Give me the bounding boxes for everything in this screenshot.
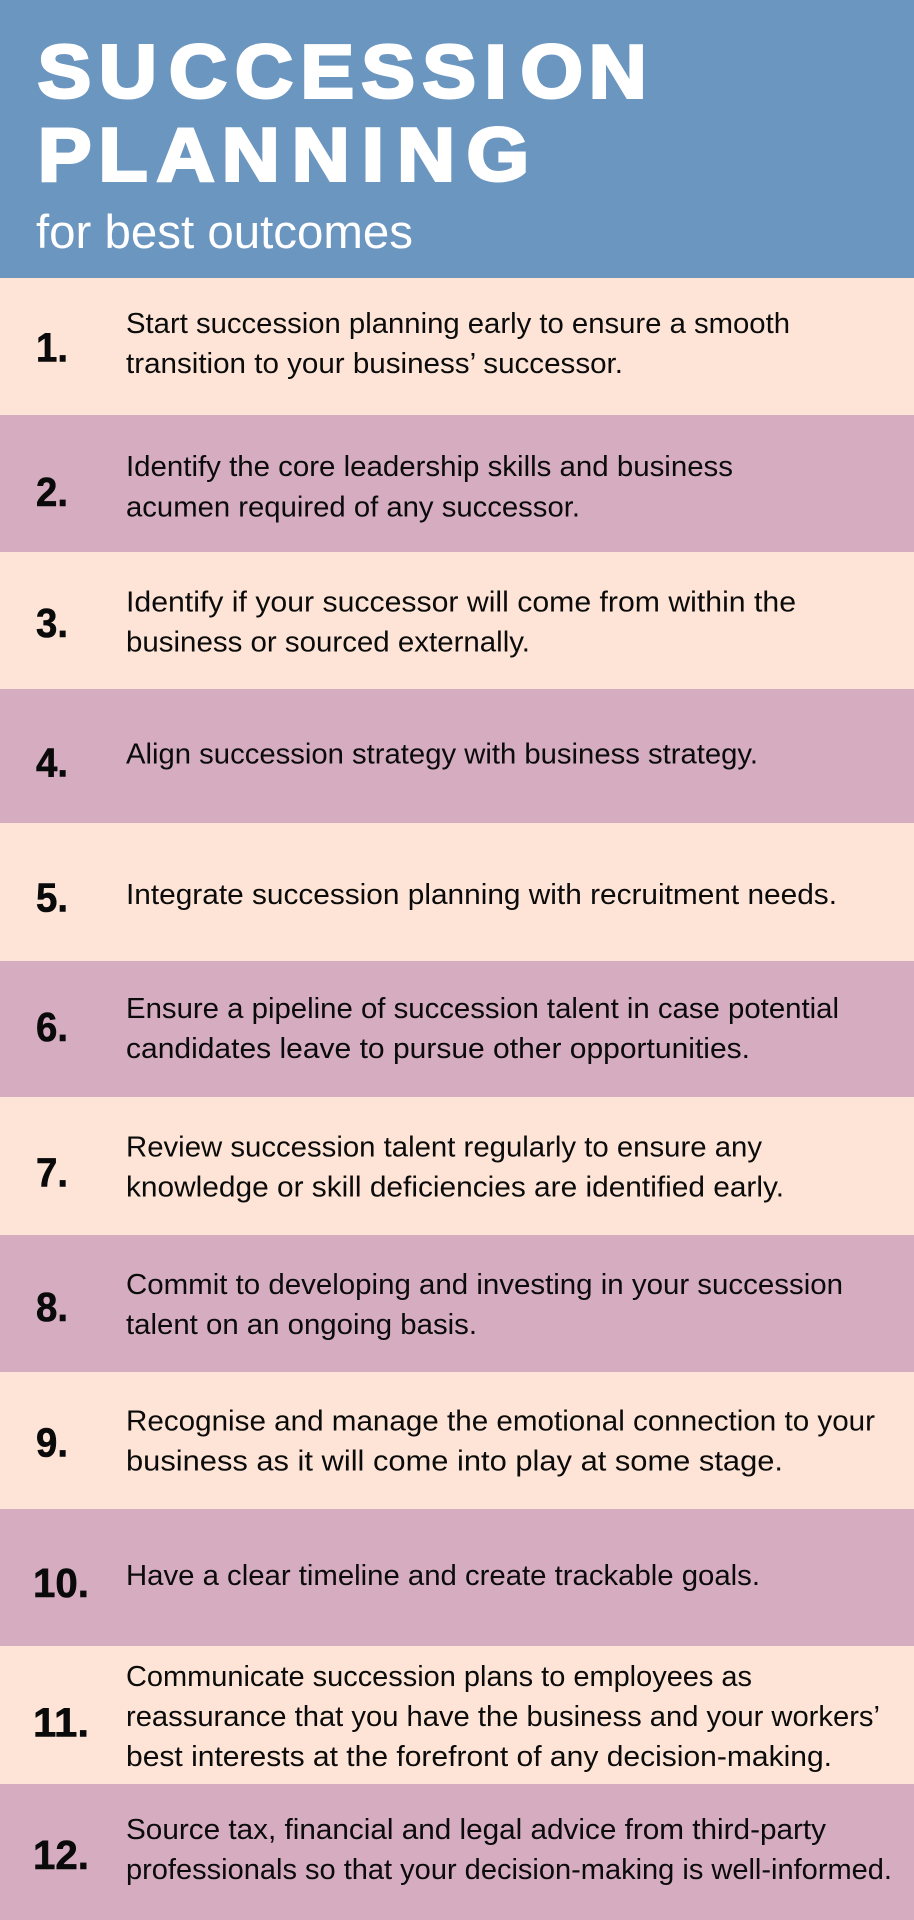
tip 4 text: Align succession strategy with business strategy.	[126, 738, 758, 770]
number 5: 5.	[36, 874, 68, 920]
number 9: 9.	[36, 1420, 68, 1466]
tip 11 text: reassurance that you have the business and your workers’	[126, 1701, 880, 1733]
number 1: 1.	[36, 324, 68, 370]
row 8	[0, 1235, 914, 1372]
tip 5 text: Integrate succession planning with recruitment needs.	[126, 879, 837, 911]
tip 3 text	[126, 586, 796, 658]
row 10	[0, 1509, 914, 1646]
tip 1 text	[126, 308, 790, 380]
title: PLANNING	[38, 114, 529, 197]
tip 1 text: Start succession planning early to ensure a smooth	[126, 308, 790, 340]
tip 8 text	[126, 1269, 843, 1341]
tip 9 text: business as it will come into play at some stage.	[126, 1446, 783, 1478]
row 9	[0, 1372, 914, 1509]
number 3: 3.	[36, 600, 68, 646]
tip 6 text	[126, 993, 839, 1065]
tip 6 text: candidates leave to pursue other opportunities.	[126, 1033, 750, 1065]
row 7	[0, 1097, 914, 1235]
row 5	[0, 823, 914, 961]
row 11	[0, 1646, 914, 1784]
tip 12 text	[126, 1814, 892, 1886]
tip 2 text	[126, 451, 733, 524]
number 4: 4.	[36, 740, 68, 786]
subtitle: for best outcomes	[36, 205, 413, 258]
tip 2 text: Identify the core leadership skills and business	[126, 451, 733, 483]
number 8: 8.	[36, 1284, 68, 1330]
tip 6 text: Ensure a pipeline of succession talent in case potential	[126, 993, 839, 1025]
tip 8 text: talent on an ongoing basis.	[126, 1309, 477, 1341]
tip 9 text	[126, 1406, 875, 1478]
tip 10 text: Have a clear timeline and create trackable goals.	[126, 1560, 760, 1592]
tip 7 text	[126, 1132, 784, 1204]
tip 3 text: business or sourced externally.	[126, 626, 530, 658]
tip 12 text: professionals so that your decision-making is well-informed.	[126, 1854, 892, 1886]
tip 11 text: best interests at the forefront of any decision-making.	[126, 1741, 832, 1773]
tip 8 text: Commit to developing and investing in your succession	[126, 1269, 843, 1301]
tip 7 text: knowledge or skill deficiencies are identified early.	[126, 1172, 784, 1204]
row 6	[0, 961, 914, 1097]
row 12	[0, 1784, 914, 1920]
row 3	[0, 552, 914, 689]
tip 9 text: Recognise and manage the emotional connection to your	[126, 1406, 875, 1438]
row 1	[0, 278, 914, 415]
tip 3 text: Identify if your successor will come from within the	[126, 586, 796, 618]
number 2: 2.	[36, 469, 68, 515]
row 4	[0, 689, 914, 823]
row 2	[0, 415, 914, 552]
tip 2 text: acumen required of any successor.	[126, 492, 580, 524]
tip 1 text: transition to your business’ successor.	[126, 348, 623, 380]
tip 7 text: Review succession talent regularly to ensure any	[126, 1132, 763, 1164]
tip 11 text	[126, 1661, 880, 1773]
number 11: 11.	[33, 1700, 89, 1746]
title: SUCCESSION	[38, 31, 647, 114]
tip 12 text: Source tax, financial and legal advice from third-party	[126, 1814, 826, 1846]
number 6: 6.	[36, 1004, 68, 1050]
number 10: 10.	[33, 1560, 89, 1606]
tip 11 text: Communicate succession plans to employees as	[126, 1661, 752, 1693]
header panel	[0, 0, 914, 278]
number 12: 12.	[33, 1832, 89, 1878]
title	[38, 31, 647, 197]
number 7: 7.	[36, 1150, 68, 1196]
